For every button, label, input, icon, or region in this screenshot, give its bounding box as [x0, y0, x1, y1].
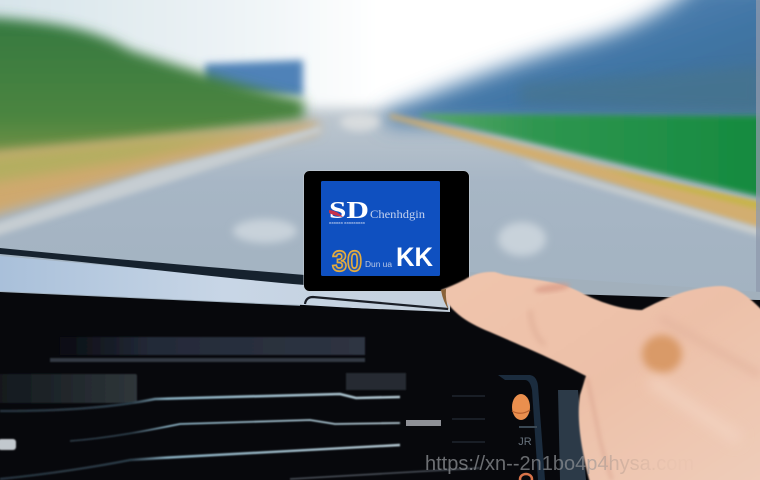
- brand name: Chenhdgin: [370, 209, 425, 221]
- small label: Dun ua: [365, 260, 393, 269]
- button stripe: [512, 410, 530, 413]
- sky: [0, 0, 760, 108]
- thumb fold line: [587, 378, 612, 480]
- green hillside, left: [0, 16, 304, 162]
- small vent tab: [406, 420, 441, 426]
- distant mountains, left: [205, 60, 303, 96]
- right-edge strip: [756, 0, 760, 295]
- vent slat highlight 2: [70, 420, 400, 441]
- dash body: [0, 292, 760, 480]
- verge, left: [0, 122, 318, 222]
- vent slat highlight 1: [0, 394, 400, 411]
- watermark url: https://xn--2n1bo4p4hysa.com: [425, 453, 694, 475]
- tagline: xxxxxx xxxxxxxxx: [329, 221, 365, 225]
- vent slat highlight 3: [0, 445, 400, 479]
- dash top surface: [0, 256, 450, 314]
- device outline glow: [304, 170, 470, 292]
- vent block right: [346, 373, 406, 390]
- finger joint shade: [530, 310, 545, 345]
- control label: JR: [518, 436, 532, 448]
- blue screen: [321, 181, 440, 276]
- orange button lower: [520, 474, 532, 480]
- vent slat highlight 4: [290, 468, 480, 479]
- windshield base line: [0, 248, 305, 285]
- control rule: [519, 426, 537, 428]
- hand pointing at device: [441, 272, 760, 480]
- knuckle mark: [642, 335, 682, 373]
- nail edge: [441, 289, 449, 310]
- far dash band: [300, 278, 760, 330]
- vent panel lower line: [50, 358, 365, 362]
- green field, right: [420, 114, 760, 206]
- road base: [0, 90, 760, 320]
- device frame: [304, 171, 469, 291]
- side screen: [558, 390, 586, 480]
- verge, right: [390, 114, 760, 242]
- mountains, right: [385, 0, 760, 125]
- road strip above windshield base: [440, 270, 760, 300]
- dashboard: [0, 248, 760, 480]
- yellow verge edge: [600, 168, 760, 220]
- control strip: [498, 375, 545, 480]
- hand and finger: [441, 272, 760, 480]
- small vent tab left: [0, 439, 16, 450]
- device base bracket: [305, 297, 448, 309]
- vent block: [0, 374, 137, 403]
- pale road shoulder: [520, 160, 760, 248]
- hand shade: [660, 318, 760, 375]
- logo red swoosh: [329, 210, 343, 217]
- faint vent dashes: [452, 396, 485, 442]
- KK mark: KK: [396, 242, 433, 272]
- mountain shadow band: [520, 66, 760, 112]
- hand tendon highlight: [650, 380, 740, 440]
- lane markings: [233, 219, 297, 243]
- background: blurred road scene: [0, 0, 760, 320]
- yellow-green verge band: [0, 130, 270, 186]
- finger crease: [534, 282, 570, 294]
- device: SD card display: [304, 170, 470, 309]
- logo SD: SD: [329, 198, 369, 224]
- orange button: [512, 394, 530, 420]
- air vent panel: [60, 337, 365, 355]
- road edge, left: [0, 126, 322, 244]
- capacity 30: 30: [332, 246, 362, 278]
